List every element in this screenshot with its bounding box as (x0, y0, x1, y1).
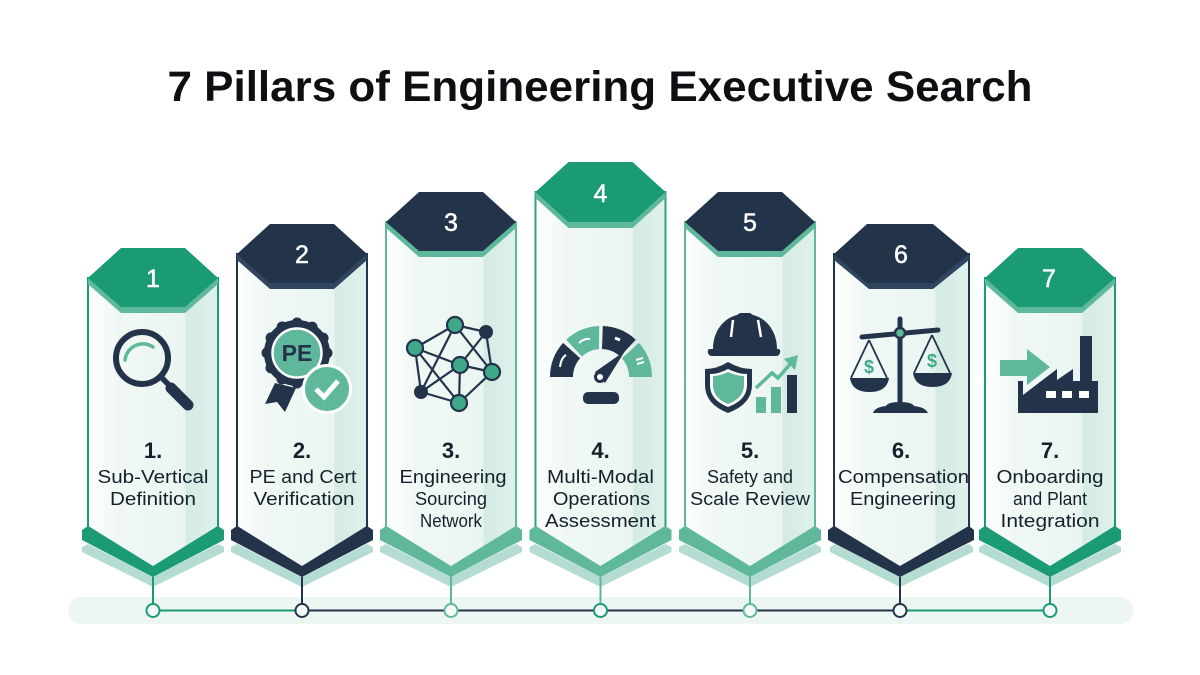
pillar 1: Sub-Vertical (97, 466, 209, 487)
icon: gauge (550, 326, 652, 404)
pillar 7: Onboarding (996, 466, 1104, 487)
pillar 1 (82, 248, 224, 587)
pillar 6: 6 (894, 241, 908, 269)
pillar 2: 2. (293, 438, 311, 463)
pillar 3: 3 (444, 209, 458, 237)
icon: network (407, 317, 500, 411)
pillar 6: Compensation (838, 466, 969, 487)
pillar 7: 7 (1042, 265, 1056, 293)
pillar 5: Scale Review (690, 488, 811, 509)
icon: balance scale: $ (864, 357, 874, 377)
icon: arrow into factory (1000, 336, 1098, 413)
pillar 4 (530, 162, 672, 587)
pillar 7: Integration (1000, 510, 1100, 531)
pillar 5: 5. (741, 438, 759, 463)
pillar 6 (828, 224, 974, 587)
pillar 4: Multi-Modal (547, 466, 654, 487)
pillar 2 (231, 224, 373, 587)
pillar 7: and Plant (1013, 488, 1087, 509)
timeline connectors and nodes (146, 577, 1056, 617)
pillar 4: Assessment (545, 510, 656, 531)
icon: balance scale: $ (927, 351, 937, 371)
pillar 3 (380, 192, 522, 587)
timeline track (68, 597, 1133, 624)
pillar 7: 7. (1041, 438, 1059, 463)
pillar 2: PE and Cert (249, 466, 357, 487)
pillar 2: 2 (295, 241, 309, 269)
pillar 5: 5 (743, 209, 757, 237)
pillar 3: 3. (442, 438, 460, 463)
pillar 2: Verification (254, 488, 354, 509)
pillar 1: 1. (144, 438, 162, 463)
pillar 7 (979, 248, 1121, 587)
pillar 1: 1 (146, 265, 160, 293)
icon: PE badge (264, 320, 350, 412)
pillar 3: Engineering (400, 466, 506, 487)
pillar 6: 6. (892, 438, 910, 463)
icon: PE badge: PE (282, 340, 312, 366)
pillar 6: Engineering (850, 488, 956, 509)
pillar 3: Network (420, 510, 483, 531)
pillar 3: Sourcing (415, 488, 487, 509)
pillar 5 (679, 192, 821, 587)
title: 7 Pillars of Engineering Executive Search (168, 63, 1032, 111)
icon: magnifying glass (116, 332, 188, 405)
pillar 4: 4 (594, 180, 608, 208)
pillar 4: 4. (591, 438, 610, 463)
pillar 5: Safety and (707, 466, 793, 487)
pillar 1: Definition (110, 488, 196, 509)
icon: helmet, shield and chart (705, 313, 798, 413)
pillar 4: Operations (553, 488, 650, 509)
icon: balance scale (850, 319, 952, 413)
